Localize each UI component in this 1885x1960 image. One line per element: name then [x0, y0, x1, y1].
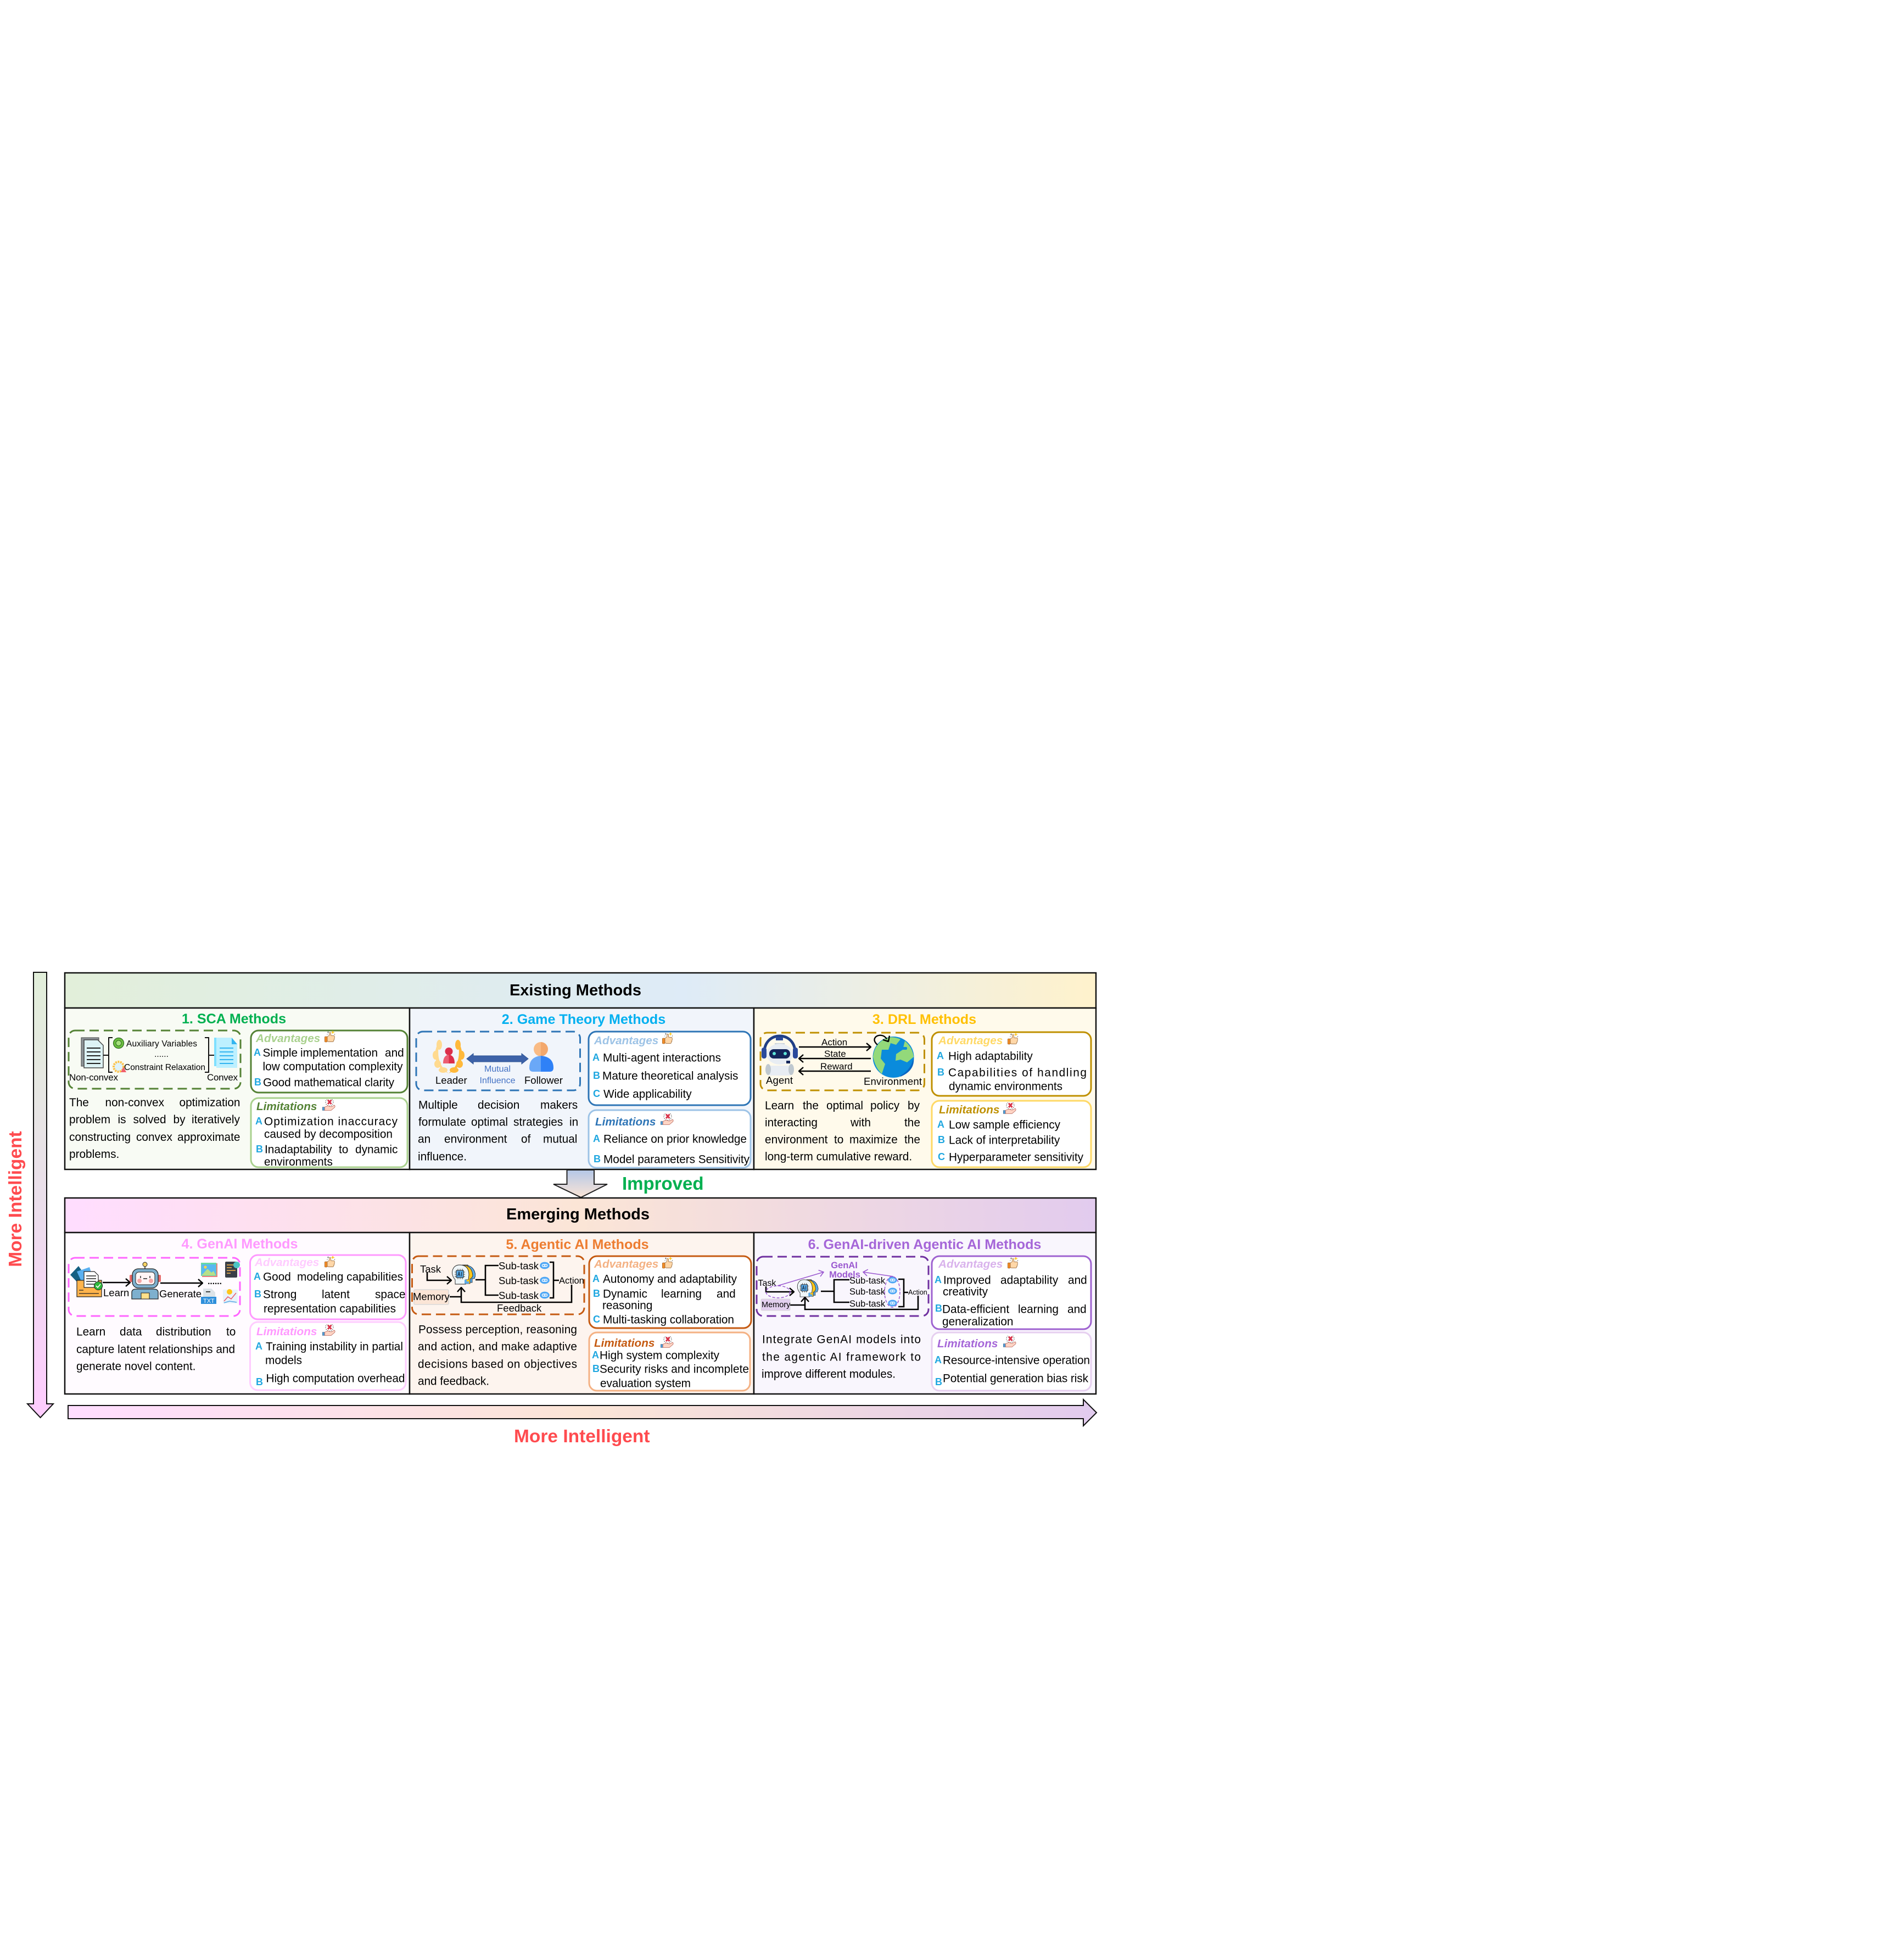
label: auxiliary variables: Auxiliary Variables — [126, 1039, 197, 1049]
diagram: GenAI-driven workflow — [757, 1257, 928, 1316]
advantage list: A — [254, 1047, 261, 1058]
icon: robot — [130, 1262, 161, 1299]
advantage list: and — [1068, 1274, 1087, 1287]
icon: AI head — [797, 1280, 818, 1297]
label: sub-task 2: Sub-task — [499, 1275, 539, 1286]
horizontal arrow: more intelligent — [68, 1399, 1097, 1426]
icon: leader with laurel — [433, 1040, 465, 1073]
advantages box: Agentic AI — [589, 1256, 751, 1328]
icon: thumbs up — [662, 1257, 673, 1268]
advantage list: Data-efficient — [942, 1303, 1009, 1315]
arrow: task to agent — [766, 1286, 794, 1292]
diagram: SCA process — [69, 1031, 240, 1089]
description: GenAI: data — [120, 1325, 142, 1339]
description: GenAI: to — [226, 1325, 236, 1339]
description: Game Theory: environment — [444, 1133, 507, 1145]
advantage list: learning — [661, 1288, 702, 1300]
icon: generated chart — [223, 1289, 238, 1303]
icon: sub-agent 3 — [888, 1300, 897, 1306]
advantages heading: Advantages — [594, 1034, 658, 1047]
advantage list: Strong — [263, 1288, 297, 1301]
icon: thumbs up — [325, 1031, 335, 1042]
limitations box: GenAI-driven Agentic AI — [932, 1332, 1091, 1391]
advantages heading: Advantages — [938, 1258, 1003, 1270]
horizontal label: More Intelligent: More Intelligent — [514, 1426, 650, 1447]
header: Emerging Methods: Emerging Methods — [506, 1206, 650, 1223]
description: SCA: iteratively — [192, 1113, 240, 1126]
arrow: environment loop — [875, 1035, 888, 1045]
limitations box: DRL — [932, 1101, 1091, 1167]
advantage list: Mature theoretical analysis — [602, 1069, 738, 1083]
limitation list: A — [593, 1133, 600, 1144]
label: ellipsis: ...... — [208, 1277, 222, 1286]
panel: DRL methods — [754, 1008, 1096, 1169]
description: DRL: interacting — [765, 1117, 818, 1129]
arrow: state — [799, 1058, 871, 1059]
limitations heading: Limitations — [256, 1100, 317, 1113]
limitation list — [937, 1119, 1084, 1164]
limitation list: Security risks and incomplete — [600, 1363, 749, 1376]
limitation list: Lack of interpretability — [949, 1134, 1060, 1146]
header: Existing Methods — [65, 973, 1096, 1008]
description: Game Theory: Multiple — [418, 1099, 458, 1111]
arrow: task to agent — [427, 1273, 451, 1280]
icon: agent robot — [762, 1036, 798, 1076]
icon: generated image — [201, 1263, 217, 1277]
label: sub-task 3: Sub-task — [849, 1299, 886, 1309]
panel: GenAI-driven Agentic AI methods — [754, 1233, 1096, 1394]
limitation list — [592, 1349, 749, 1390]
limitation list: Model parameters Sensitivity — [603, 1153, 750, 1166]
arrow: GenAI to task and memory — [778, 1272, 824, 1286]
description: Game Theory: in — [569, 1116, 578, 1129]
advantage list: dynamic environments — [949, 1080, 1062, 1093]
advantage list: and — [717, 1288, 736, 1300]
advantage list: and — [385, 1046, 404, 1060]
label: sub-task 3: Sub-task — [499, 1290, 539, 1301]
advantages box: Game Theory — [589, 1032, 751, 1105]
description: GenAI-driven Agentic AI — [762, 1333, 921, 1380]
arrow: learn — [103, 1282, 130, 1283]
advantage list: latent — [322, 1288, 350, 1301]
diagram: agentic workflow — [412, 1256, 584, 1314]
advantage list — [592, 1273, 737, 1326]
limitations heading: Limitations — [595, 1116, 656, 1128]
description: SCA: by — [174, 1113, 186, 1126]
advantage list: C — [593, 1314, 600, 1325]
heading: Agentic AI methods: 5. Agentic AI Methods — [506, 1237, 649, 1252]
limitation list: High computation overhead — [266, 1373, 405, 1385]
icon: non-convex document — [81, 1038, 103, 1068]
description: Game Theory: optimal — [471, 1116, 508, 1129]
panel: SCA methods — [65, 1008, 410, 1169]
icon: generated code — [225, 1262, 240, 1278]
label: convex: Convex — [207, 1072, 238, 1083]
advantage list: Autonomy and adaptability — [603, 1273, 737, 1286]
limitation list: A — [937, 1119, 944, 1130]
arrow: feedback — [461, 1285, 572, 1302]
limitation list: B — [938, 1134, 945, 1145]
advantage list: adaptability — [1000, 1274, 1059, 1287]
limitations heading: Limitations — [256, 1325, 317, 1338]
advantage list: Wide applicability — [603, 1088, 692, 1100]
label: action: Action — [559, 1276, 584, 1286]
advantage list: space — [375, 1288, 405, 1301]
advantage list: implementation — [300, 1046, 378, 1060]
icon: convex document — [214, 1038, 237, 1068]
arrow: reward — [799, 1071, 871, 1072]
icon: hand with cross — [322, 1098, 335, 1110]
label: learn: Learn — [103, 1287, 129, 1298]
description: DRL: long-term cumulative reward. — [765, 1151, 912, 1163]
memory block: Memory — [762, 1301, 791, 1309]
label: improved: Improved — [622, 1173, 704, 1194]
advantages heading: Advantages — [938, 1034, 1003, 1047]
advantages heading: Advantages — [594, 1258, 658, 1270]
label: leader: Leader — [435, 1074, 467, 1086]
limitation list: Potential generation bias risk — [943, 1373, 1089, 1385]
heading: SCA methods: 1. SCA Methods — [182, 1011, 286, 1027]
description: GenAI: capture latent relationships and — [76, 1343, 235, 1356]
description: Game Theory: an — [418, 1133, 430, 1145]
limitations heading: Limitations — [594, 1337, 655, 1349]
advantage list: A — [935, 1274, 942, 1285]
description: Game Theory: decision — [478, 1099, 519, 1111]
limitation list: evaluation system — [600, 1377, 691, 1390]
advantage list: modeling capabilities — [297, 1270, 403, 1284]
highlight ellipse: sub-agents — [885, 1276, 900, 1307]
icon: sub-agent 2 — [540, 1277, 550, 1284]
advantage list: creativity — [943, 1286, 988, 1298]
advantage list: Multi-agent interactions — [603, 1052, 721, 1064]
advantage list — [592, 1052, 738, 1100]
advantage list: B — [254, 1077, 261, 1088]
advantage list: representation capabilities — [264, 1302, 396, 1315]
advantage list: B — [937, 1067, 944, 1078]
limitations box: GenAI — [250, 1322, 406, 1390]
icon: data folder — [70, 1266, 102, 1297]
limitation list: A — [935, 1354, 942, 1365]
description: GenAI-driven Agentic AI: Integrate GenAI models into — [762, 1333, 921, 1346]
description: Game Theory: strategies — [513, 1116, 563, 1129]
description: SCA: non-convex — [105, 1096, 165, 1109]
icon: hand with cross — [1003, 1335, 1016, 1347]
advantage list: High adaptability — [948, 1050, 1033, 1063]
icon: hand with cross — [1003, 1101, 1016, 1113]
description: DRL: optimal — [826, 1099, 863, 1112]
limitation list: Low sample efficiency — [949, 1119, 1061, 1131]
description: Agentic AI — [418, 1323, 577, 1388]
label: action: Action — [821, 1037, 847, 1048]
label: reward: Reward — [820, 1061, 853, 1072]
arrow: mutual influence — [467, 1054, 528, 1064]
limitation list — [593, 1133, 750, 1166]
label: agent: Agent — [766, 1074, 793, 1086]
label: task: Task — [758, 1279, 776, 1288]
section: Existing Methods — [65, 973, 1096, 1169]
advantage list: A — [254, 1271, 261, 1282]
limitation list: Hyperparameter sensitivity — [949, 1151, 1084, 1164]
limitations heading: Limitations — [937, 1337, 998, 1350]
limitation list: environments — [264, 1156, 333, 1168]
description: SCA: constructing — [69, 1131, 131, 1144]
description: DRL: by — [908, 1099, 920, 1112]
limitations heading: Limitations — [939, 1104, 999, 1116]
description: DRL: to — [834, 1133, 843, 1146]
diagram: learn and generate — [69, 1258, 240, 1316]
description: Game Theory: influence. — [418, 1151, 467, 1163]
limitation list: B — [256, 1144, 263, 1155]
description: Agentic AI: and feedback. — [418, 1375, 489, 1388]
arrow: improved — [553, 1170, 607, 1197]
memory block: Memory — [413, 1291, 450, 1302]
limitation list: A — [255, 1341, 262, 1352]
description: SCA: convex — [136, 1131, 172, 1144]
advantages heading: Advantages — [255, 1032, 320, 1045]
description: SCA: approximate — [177, 1131, 240, 1144]
panel: GenAI methods — [65, 1233, 410, 1394]
advantages box: GenAI — [250, 1255, 406, 1319]
description: Game Theory: makers — [540, 1099, 578, 1111]
label: ellipsis: ...... — [154, 1050, 169, 1059]
description: GenAI: generate novel content. — [76, 1360, 195, 1373]
description: SCA: problem — [69, 1113, 110, 1126]
advantage list: Dynamic — [603, 1288, 647, 1300]
advantage list — [254, 1270, 405, 1315]
advantage list: Multi-tasking collaboration — [603, 1313, 734, 1326]
advantage list: generalization — [942, 1315, 1014, 1328]
label: GenAI models: Models — [829, 1270, 860, 1280]
advantages heading: Advantages — [254, 1256, 319, 1269]
label: generate: Generate — [159, 1288, 202, 1300]
description: DRL: policy — [870, 1099, 900, 1112]
limitation list — [255, 1341, 405, 1387]
description: GenAI: distribution — [156, 1325, 211, 1339]
advantage list — [937, 1050, 1087, 1093]
description: DRL: the — [904, 1117, 920, 1129]
description: Game Theory: of — [521, 1133, 531, 1145]
icon: generated text file — [201, 1289, 216, 1304]
limitation list: B — [256, 1376, 263, 1387]
limitation list: dynamic — [355, 1143, 398, 1156]
vertical arrow: more intelligent — [27, 972, 53, 1418]
limitation list: B — [935, 1376, 942, 1387]
vertical label: More Intelligent: More Intelligent — [5, 1131, 26, 1267]
label: GenAI models — [829, 1261, 860, 1280]
heading: GenAI-driven Agentic AI methods: 6. GenAI-driven Agentic AI Methods — [808, 1237, 1041, 1252]
icon: hand with cross — [322, 1323, 335, 1335]
description: Agentic AI: decisions based on objectives — [418, 1358, 577, 1370]
description: SCA: problems. — [69, 1148, 119, 1161]
label: mutual influence — [480, 1065, 516, 1085]
advantage list: Simple — [262, 1046, 298, 1060]
limitations box: Agentic AI — [589, 1332, 750, 1391]
description: GenAI-driven Agentic AI: improve different modules. — [762, 1368, 896, 1380]
limitation list: A — [255, 1116, 262, 1127]
label: sub-task 1: Sub-task — [849, 1276, 886, 1286]
label: GenAI models: GenAI — [831, 1261, 858, 1270]
header: Existing Methods: Existing Methods — [510, 982, 641, 999]
label: feedback: Feedback — [497, 1302, 542, 1314]
label: follower: Follower — [524, 1074, 563, 1086]
description: DRL: maximize — [849, 1133, 898, 1146]
limitation list: caused by decomposition — [264, 1128, 393, 1141]
icon: sub-agent 1 — [888, 1277, 897, 1283]
icon: sub-agent 3 — [540, 1292, 550, 1298]
limitation list: High system complexity — [600, 1349, 720, 1362]
limitation list: B — [594, 1153, 601, 1164]
limitation list: Reliance on prior knowledge — [603, 1133, 747, 1145]
heading: Game Theory methods: 2. Game Theory Methods — [502, 1012, 665, 1027]
description: DRL: Learn — [765, 1099, 794, 1112]
description: Game Theory: mutual — [543, 1133, 577, 1145]
limitation list: models — [265, 1354, 302, 1367]
advantage list — [254, 1046, 404, 1089]
advantage list: A — [592, 1052, 600, 1063]
advantage list: learning — [1018, 1303, 1059, 1315]
label: mutual influence: Mutual — [484, 1065, 511, 1074]
panel: Game Theory methods — [410, 1008, 754, 1169]
description: Game Theory: formulate — [418, 1116, 466, 1129]
advantage list: low computation complexity — [262, 1061, 403, 1073]
icon: sub-agent 1 — [540, 1262, 550, 1269]
icon: auxiliary variables — [113, 1038, 124, 1049]
icon: generated text file: TXT — [203, 1298, 215, 1304]
diagram: leader and follower — [416, 1032, 580, 1090]
description: SCA: optimization — [179, 1096, 240, 1109]
advantage list: B — [935, 1303, 942, 1314]
limitation list — [935, 1354, 1090, 1387]
heading: DRL methods: 3. DRL Methods — [872, 1012, 976, 1027]
description: DRL: the — [803, 1099, 819, 1112]
icon: globe — [873, 1037, 914, 1078]
advantage list: A — [592, 1273, 600, 1284]
panel: Agentic AI methods — [410, 1233, 754, 1394]
limitation list: Inadaptability — [265, 1143, 332, 1156]
advantage list: Capabilities of handling — [948, 1066, 1087, 1079]
description: SCA: The — [69, 1096, 89, 1109]
heading: GenAI methods: 4. GenAI Methods — [182, 1236, 298, 1252]
header: Emerging Methods — [65, 1198, 1096, 1233]
description: DRL: the — [904, 1133, 920, 1146]
limitation list: Training instability in partial — [266, 1341, 403, 1353]
arrow: generate — [160, 1283, 203, 1284]
advantage list: Good — [263, 1270, 291, 1284]
icon: constraint relaxation — [114, 1062, 126, 1072]
icon: thumbs up — [1008, 1033, 1018, 1044]
advantage list — [935, 1274, 1087, 1328]
label: mutual influence: Influence — [480, 1076, 516, 1085]
label: state: State — [824, 1049, 846, 1059]
description: Agentic AI: and action, and make adaptive — [418, 1341, 577, 1353]
description: GenAI-driven Agentic AI: the agentic AI framework to — [762, 1351, 921, 1364]
icon: sub-agent 2 — [888, 1288, 897, 1294]
advantage list: and — [1067, 1303, 1087, 1315]
description: SCA: is — [118, 1113, 126, 1126]
advantage list: Good mathematical clarity — [263, 1076, 395, 1089]
limitation list: B — [592, 1363, 600, 1374]
advantages box: SCA — [251, 1031, 407, 1093]
label: sub-task 1: Sub-task — [499, 1260, 539, 1272]
advantage list: reasoning — [602, 1299, 652, 1312]
label: constraint relaxation: Constraint Relaxation — [124, 1063, 205, 1072]
description: GenAI: Learn — [76, 1325, 105, 1339]
description: DRL: environment — [765, 1133, 828, 1146]
advantage list: B — [593, 1288, 600, 1299]
arrow: feedback — [805, 1296, 918, 1309]
highlight ellipse: task and memory — [766, 1286, 790, 1298]
limitation list: Resource-intensive operation — [943, 1354, 1090, 1367]
icon: thumbs up — [662, 1032, 673, 1044]
label: task: Task — [420, 1263, 441, 1275]
icon: thumbs up — [1008, 1257, 1018, 1268]
limitation list — [255, 1116, 398, 1168]
diagram: agent and environment — [760, 1033, 925, 1090]
label: non-convex: Non-convex — [69, 1072, 119, 1083]
advantages box: GenAI-driven Agentic AI — [932, 1256, 1091, 1329]
description: DRL: with — [850, 1117, 871, 1129]
icon: hand with cross — [661, 1335, 673, 1347]
advantage list: B — [254, 1289, 261, 1300]
icon: follower — [529, 1042, 553, 1072]
limitation list: C — [938, 1151, 945, 1162]
label: sub-task 2: Sub-task — [849, 1287, 886, 1297]
label: environment: Environment — [864, 1076, 922, 1087]
advantage list: Improved — [943, 1274, 991, 1287]
advantages box: DRL — [932, 1032, 1091, 1096]
advantage list: C — [593, 1088, 600, 1099]
icon: hand with cross — [661, 1112, 673, 1124]
advantage list: B — [593, 1070, 600, 1081]
advantage list: A — [937, 1050, 944, 1061]
label: action: Action — [908, 1289, 927, 1296]
limitations box: SCA — [251, 1098, 407, 1168]
limitation list: Optimization inaccuracy — [264, 1116, 398, 1128]
limitation list: to — [339, 1143, 348, 1156]
limitation list: A — [592, 1349, 599, 1360]
arrow: action — [799, 1046, 871, 1048]
section: Emerging Methods — [65, 1198, 1096, 1394]
limitations box: Game Theory — [589, 1110, 751, 1168]
icon: thumbs up — [325, 1256, 335, 1267]
description: Agentic AI: Possess perception, reasoning — [418, 1323, 577, 1336]
description: SCA: solved — [133, 1113, 166, 1126]
icon: AI head — [452, 1265, 476, 1284]
arrow: GenAI to sub-tasks — [863, 1272, 893, 1276]
